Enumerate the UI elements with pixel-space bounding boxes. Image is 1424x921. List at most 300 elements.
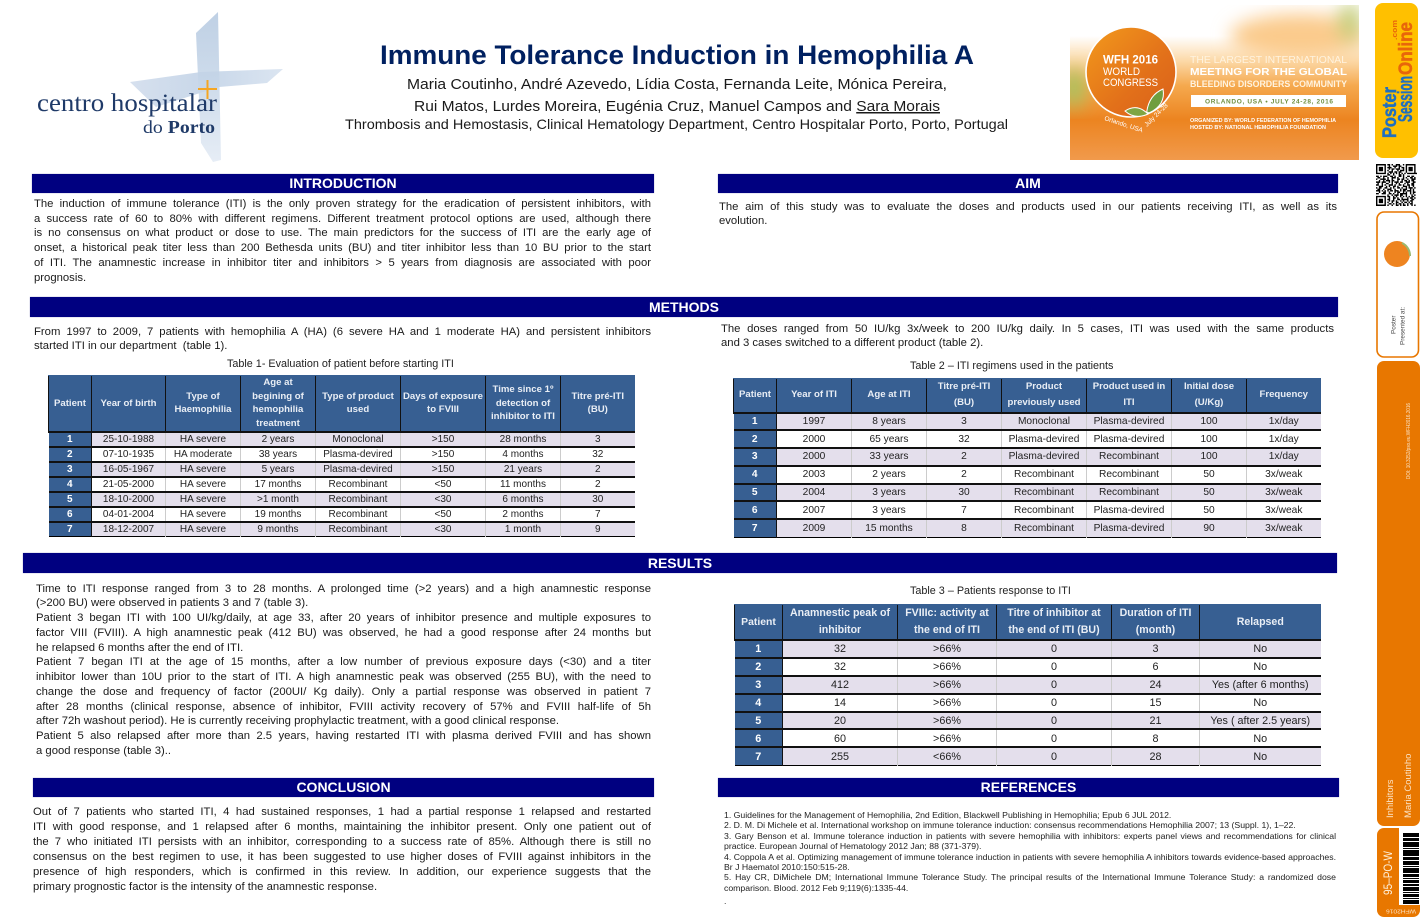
text: conclusion: ITI with good response, and 1 relapsed after 6 months, maintaining the inhibitor present. Only one patient out of (33, 820, 651, 832)
table 3: patients response: 0 (1051, 697, 1057, 709)
table 3: patients response: the end of ITI (914, 624, 980, 636)
table 2: ITI regimens: 1997 (803, 416, 825, 427)
table 1: evaluation of patients: inhibitor to ITI (491, 411, 555, 422)
table 1: evaluation of patients: 7 (67, 524, 73, 535)
table 1: evaluation of patients: Recombinant (329, 524, 387, 535)
text: aim (719, 200, 1337, 227)
congress banner: WFH 2016 World Congress: Orlando, USA (1103, 115, 1144, 134)
table 3: patients response: Relapsed (1237, 616, 1284, 628)
table 3: patients response: >66% (933, 715, 961, 727)
table 1: evaluation of patients: 21 years (504, 464, 542, 474)
table 2: ITI regimens: 3x/weak (1265, 469, 1302, 480)
table 2: ITI regimens: Plasma-devired (1094, 523, 1164, 534)
text: introduction: prognosis. (34, 272, 86, 284)
table 1: evaluation of patients: >150 (432, 434, 454, 444)
table 3: patients response: >66% (933, 679, 961, 691)
table 2: ITI regimens: Recombinant (1099, 469, 1159, 480)
PosterSessionOnline logo: Online (1396, 22, 1417, 75)
text: references: . (724, 896, 726, 906)
heading: results: RESULTS (648, 555, 712, 571)
congress banner: WFH 2016 World Congress (1070, 5, 1359, 160)
congress banner: WFH 2016 World Congress: HOSTED BY: NATIONAL HEMOPHILIA FOUNDATION (1190, 125, 1326, 131)
table 3: patients response: 32 (834, 661, 846, 673)
table 1: evaluation of patients: <30 (435, 524, 451, 535)
text: introduction (34, 198, 652, 284)
table 2: ITI regimens: 1x/day (1269, 416, 1299, 427)
table 1: evaluation of patients: 38 years (259, 448, 297, 460)
table 2: ITI regimens: 50 (1203, 487, 1215, 498)
table 2: ITI regimens: 32 (958, 434, 970, 445)
text: methods right (721, 322, 1334, 349)
text: results: he relapsed 6 months after the end of ITI. (36, 642, 243, 654)
table 1: evaluation of patients: Recombinant (329, 508, 387, 520)
table 1: evaluation of patients: 16-05-1967 (103, 464, 154, 474)
text: results: after 72h washout period). He is currently receiving prophylactic treatment, with a good clinical response. (36, 715, 559, 727)
panel: methods (30, 296, 1338, 538)
table 3: patients response: 2 (755, 661, 761, 673)
text: methods left: From 1997 to 2009, 7 patients with hemophilia A (HA) (6 severe HA and 1 moderate HA) and persistent inhibitors (34, 326, 651, 338)
table 1: evaluation of patients: Plasma-devired (323, 464, 393, 474)
table 3: patients response: No (1253, 697, 1267, 709)
table 1: evaluation of patients: 1 month (505, 524, 541, 535)
table 2: ITI regimens: Monoclonal (1018, 416, 1070, 427)
table 1: evaluation of patients: 3 (67, 464, 73, 474)
congress banner: WFH 2016 World Congress: MEETING FOR THE GLOBAL (1190, 66, 1348, 78)
table 2: ITI regimens: 8 (961, 523, 967, 534)
table 2: ITI regimens: 2 (752, 434, 758, 445)
table 1: evaluation of patients: 9 (595, 524, 601, 535)
text: results: Time to ITI response ranged from 3 to 28 months. A prolonged time (>2 years) and a high anamnestic response (36, 582, 651, 594)
table 3: patients response: 0 (1051, 751, 1057, 763)
table 1: evaluation of patients: 6 (67, 508, 73, 520)
table 1: evaluation of patients: begining of (252, 391, 304, 402)
table 1: evaluation of patients: hemophilia (253, 404, 303, 415)
table 1: evaluation of patients: 4 months (502, 448, 544, 460)
text: introduction: The induction of immune tolerance (ITI) is the only proven strategy for the eradication of persistent inhibitors, with (34, 198, 651, 210)
text: references: comparison. Blood. 2012 Feb 9;119(6):1335-44. (724, 883, 908, 893)
heading: introduction: INTRODUCTION (289, 175, 397, 191)
table 3: patients response: 21 (1149, 715, 1162, 727)
table 3: patients response: >66% (933, 697, 961, 709)
text: introduction: of ITI. The anamnestic increase in inhibitor titer and inhibitors > 5 years from diagnosis are associated with poor (34, 257, 651, 269)
heading: results (23, 553, 1337, 573)
table 2: ITI regimens: 3 (961, 416, 967, 427)
table 3: patients response: 6 (755, 733, 761, 745)
heading: introduction (32, 174, 654, 193)
text: results: a good response (table 3).. (36, 745, 171, 757)
table 2: ITI regimens: 3x/weak (1265, 523, 1302, 534)
table 2: ITI regimens: Product (1026, 381, 1062, 392)
table 3: patients response: 32 (834, 643, 846, 655)
text: references: 3. Gary Benson et al. Immune tolerance induction in patients with severe hemophilia with inhibitors: experts panel views and recommendations for clinical (724, 831, 1336, 841)
table 1: evaluation of patients: >1 month (257, 494, 299, 504)
text: introduction: a success rate of 60 to 80% with different regimens. Different treatment protocol options are used, although there (34, 213, 651, 225)
table 2: ITI regimens: 6 (752, 505, 758, 516)
table 2: ITI regimens: Year of ITI (791, 389, 837, 400)
table 1: evaluation of patients: Type of product (322, 391, 394, 402)
table 2: ITI regimens: Recombinant (1014, 505, 1074, 516)
table 2: ITI regimens: 2004 (803, 487, 825, 498)
table 1: evaluation of patients: Titre pré-ITI (571, 391, 624, 402)
table 1: evaluation of patients: 3 (595, 434, 601, 444)
table 1: evaluation of patients: 07-10-1935 (103, 448, 154, 460)
title and authors (345, 40, 1008, 132)
table 3: patients response: 6 (1152, 661, 1158, 673)
table 3: patients response: 28 (1149, 751, 1162, 763)
text: aim: evolution. (719, 215, 767, 227)
table 1: evaluation of patients (48, 375, 634, 537)
panel: conclusion (32, 778, 654, 892)
text: methods left (34, 326, 651, 352)
table 2: ITI regimens: Plasma-devired (1009, 434, 1079, 445)
table 3: patients response: 15 (1149, 697, 1162, 709)
table 1: evaluation of patients: HA severe (180, 434, 226, 444)
panel: references (718, 778, 1340, 906)
table 3: patients response: 412 (831, 679, 849, 691)
table 2: ITI regimens: 30 (958, 487, 970, 498)
text: references: 4. Coppola A et al. Optimizing management of immune tolerance induction in patients with severe hemophilia A inhibitors towards evidence-based approaches. (724, 852, 1336, 862)
congress banner: WFH 2016 World Congress: July 24-28 (1143, 102, 1170, 128)
table 3: patients response: 1 (755, 643, 761, 655)
text: conclusion: Out of 7 patients who started ITI, 4 had sustained responses, 1 had a partial response 1 relapsed and restarted (33, 806, 651, 818)
table 1: evaluation of patients: 30 (592, 494, 603, 504)
table 3: patients response: 0 (1051, 733, 1057, 745)
table 1: evaluation of patients: >150 (432, 464, 454, 474)
congress banner: WFH 2016 World Congress: BLEEDING DISORDERS COMMUNITY (1190, 79, 1348, 90)
table 1: evaluation of patients: Recombinant (329, 478, 387, 490)
panel: aim (718, 174, 1338, 227)
table 1: evaluation of patients: HA severe (180, 508, 226, 520)
table 3: patients response: No (1253, 733, 1267, 745)
table 2: ITI regimens: 100 (1200, 416, 1218, 427)
table 1: evaluation of patients: Time since 1º (493, 384, 553, 395)
table 2: ITI regimens: 3 years (872, 505, 906, 516)
poster number and barcode: 95–PO-W (1381, 850, 1395, 895)
table 2: ITI regimens: (U/Kg) (1195, 397, 1223, 408)
text: results (36, 582, 651, 757)
table 3: patients response: Yes ( after 2.5 years) (1210, 715, 1310, 727)
text: methods left: started ITI in our department (table 1). (34, 340, 227, 352)
table 2: ITI regimens: 3 years (872, 487, 906, 498)
table 1: evaluation of patients: <30 (435, 494, 451, 504)
table 3: patients response: 20 (834, 715, 846, 727)
table 3: patients response: 60 (834, 733, 846, 745)
table 1: evaluation of patients: Haemophilia (174, 404, 232, 415)
text: references: 5. Hay CR, DiMichele DM; International Immune Tolerance Study. The principal results of the International Immune Tolerance Study: a randomized dose (724, 872, 1336, 882)
text: aim: The aim of this study was to evaluate the doses and products used in our patients receiving ITI, as well as its (719, 200, 1337, 212)
table 3: patients response: 255 (831, 751, 849, 763)
text: results: Patient 3 began ITI with 100 UI/kg/daily, at age 33, after 20 years of inhibitor presence and multiple exposures to (36, 612, 651, 624)
table 3: patients response: 0 (1051, 643, 1057, 655)
table 3: patients response: Anamnestic peak of (790, 607, 890, 619)
text: results: factor VIII (FVIII). A high anamnestic peak (412 BU) was observed, he had a good response after 24 months but (36, 627, 651, 639)
table 1: evaluation of patients: 18-12-2007 (103, 524, 154, 535)
poster number and barcode: WFH2016 (1386, 908, 1416, 914)
heading: conclusion: CONCLUSION (296, 779, 391, 795)
heading: conclusion (33, 778, 654, 797)
table 2: ITI regimens: 1 (752, 416, 758, 427)
table 3: patients response: inhibitor (819, 624, 861, 636)
table 3: patients response: 3 (755, 679, 761, 691)
text: references: Br J Haematol 2010:150:515-28. (724, 862, 850, 872)
table 2: ITI regimens: 3 (752, 451, 758, 462)
table 1: evaluation of patients: HA severe (180, 478, 226, 490)
table 1: evaluation of patients: 4 (67, 478, 73, 490)
table 1: evaluation of patients: (BU) (588, 404, 608, 415)
caption: table 3: Table 3 – Patients response to ITI (910, 585, 1071, 597)
heading: methods: METHODS (649, 299, 719, 315)
table 2: ITI regimens: 2000 (803, 434, 825, 445)
table 2: ITI regimens: 3x/weak (1265, 487, 1302, 498)
table 2: ITI regimens (733, 378, 1320, 538)
table 2: ITI regimens: Recombinant (1014, 487, 1074, 498)
table 2: ITI regimens: 50 (1203, 505, 1215, 516)
congress banner: WFH 2016 World Congress: ORGANIZED BY: WORLD FEDERATION OF HEMOPHILIA (1190, 118, 1336, 124)
table 2: ITI regimens: 100 (1200, 451, 1218, 462)
table 1: evaluation of patients: Patient (54, 398, 86, 408)
authors line 1: Maria Coutinho, André Azevedo, Lídia Costa, Fernanda Leite, Mónica Pereira, (407, 76, 947, 93)
table 1: evaluation of patients: Year of birth (100, 398, 156, 408)
table 3: patients response: FVIIIc: activity at (905, 607, 989, 619)
table 2: ITI regimens: 90 (1203, 523, 1215, 534)
logo: centro hospitalar do Porto: do Porto (143, 117, 215, 137)
orange info strip: DOI: 10.3252/pso.eu.WFH2016.2016 (1406, 403, 1412, 479)
table 3: patients response: <66% (933, 751, 961, 763)
table 2: ITI regimens: Frequency (1259, 389, 1308, 400)
table 3: patients response: 0 (1051, 679, 1057, 691)
table 2: ITI regimens: Plasma-devired (1094, 416, 1164, 427)
text: conclusion: primary prognostic factor is the intensity of the anamnestic response. (33, 880, 377, 892)
table 3: patients response: Yes (after 6 months) (1212, 679, 1309, 691)
table 3: patients response: Titre of inhibitor at (1007, 607, 1101, 619)
table 2: ITI regimens: Plasma-devired (1009, 451, 1079, 462)
text: results: Patient 5 also relapsed after more than 2.5 years, having restarted ITI with plasma derived FVIII and has shown (36, 730, 651, 742)
table 2: ITI regimens: 2 (961, 451, 967, 462)
congress banner: WFH 2016 World Congress: ORLANDO, USA • JULY 24-28, 2016 (1205, 98, 1333, 106)
table 2: ITI regimens: 1x/day (1269, 451, 1299, 462)
table 1: evaluation of patients: 2 (595, 464, 601, 474)
presented-at box: Presented at: (1400, 307, 1406, 345)
congress banner: WFH 2016 World Congress: WORLD (1103, 66, 1140, 78)
table 2: ITI regimens: 1x/day (1269, 434, 1299, 445)
table 3: patients response: 0 (1051, 661, 1057, 673)
table 1: evaluation of patients: 28 months (500, 434, 546, 444)
table 2: ITI regimens: Recombinant (1099, 451, 1159, 462)
table 1: evaluation of patients: Days of exposure (403, 391, 483, 402)
text: results: change the dose and frequency of factor (200UI/ Kg daily). Only a partial response was observed in patient 7 (36, 686, 651, 698)
poster number and barcode (1377, 828, 1420, 917)
PosterSessionOnline logo: .com (1392, 20, 1399, 40)
table 1: evaluation of patients: 5 (67, 494, 73, 504)
sidebar: PosterSessionOnline strip (1375, 3, 1420, 917)
table 2: ITI regimens: (BU) (954, 397, 974, 408)
presented-at box (1377, 212, 1418, 357)
affiliation: Thrombosis and Hemostasis, Clinical Hematology Department, Centro Hospitalar Porto, Porto, Portugal (345, 116, 1008, 132)
caption: table 2: Table 2 – ITI regimens used in the patients (910, 360, 1113, 372)
table 1: evaluation of patients: detection of (496, 398, 550, 408)
congress banner: WFH 2016 World Congress: THE LARGEST INTERNATIONAL (1190, 54, 1347, 66)
logo: centro hospitalar do Porto (37, 12, 283, 162)
table 2: ITI regimens: Recombinant (1099, 487, 1159, 498)
heading: methods (30, 297, 1338, 317)
table 2: ITI regimens: 50 (1203, 469, 1215, 480)
text: introduction: onset, a historical peak titer less than 200 Bethesda units (BU) and titer inhibitor less than 10 BU prior to the start (34, 242, 651, 254)
table 2: ITI regimens: Product used in (1093, 381, 1165, 392)
table 1: evaluation of patients: 11 months (500, 478, 546, 490)
orange info strip (1377, 361, 1420, 826)
table 2: ITI regimens: Recombinant (1014, 469, 1074, 480)
QR code (1376, 164, 1417, 206)
table 2: ITI regimens: 2007 (803, 505, 825, 516)
PosterSessionOnline logo (1375, 3, 1418, 158)
table 1: evaluation of patients: 2 years (262, 434, 294, 444)
table 3: patients response: No (1253, 661, 1267, 673)
text: conclusion (33, 806, 652, 892)
table 2: ITI regimens: Plasma-devired (1094, 505, 1164, 516)
logo: centro hospitalar do Porto: centro hospitalar (37, 90, 218, 117)
table 1: evaluation of patients: 5 years (262, 464, 294, 474)
table 1: evaluation of patients: 2 (67, 448, 73, 460)
table 1: evaluation of patients: Plasma-devired (323, 448, 393, 460)
table 2: ITI regimens: 2000 (803, 451, 825, 462)
table 1: evaluation of patients: HA severe (180, 524, 226, 535)
table 1: evaluation of patients: <50 (435, 478, 451, 490)
table 1: evaluation of patients: 9 months (257, 524, 299, 535)
text: methods right: and 3 cases switched to a different product (table 2). (721, 337, 983, 349)
table 3: patients response: 8 (1152, 733, 1158, 745)
text: references: practice. European Journal of Hematology 2012 Jan; 88 (371-379). (724, 841, 981, 851)
table 3: patients response: 7 (755, 751, 761, 763)
table 3: patients response (734, 604, 1320, 766)
table 1: evaluation of patients: 6 months (502, 494, 544, 504)
table 1: evaluation of patients: HA severe (180, 494, 226, 504)
table 1: evaluation of patients: 21-05-2000 (103, 478, 154, 490)
table 1: evaluation of patients: HA moderate (174, 448, 232, 460)
text: results: inhibitor lower than 10U prior to the start of ITI. A high anamnestic peak was observed (255 BU), with the need to (36, 671, 651, 683)
caption: table 1: Table 1- Evaluation of patient before starting ITI (227, 358, 454, 370)
table 1: evaluation of patients: 1 (67, 434, 73, 444)
table 2: ITI regimens: Age at ITI (867, 389, 911, 400)
authors line 2: Rui Matos, Lurdes Moreira, Eugénia Cruz, Manuel Campos and Sara Morais (414, 98, 940, 115)
table 2: ITI regimens: Initial dose (1184, 381, 1234, 392)
text: results: after 28 months (clinical response, absence of inhibitor, FVIII activity recovery of 57% and FVIII half-life of 5h (36, 700, 651, 712)
text: conclusion: the 7 who initiated ITI persists with an inhibitor, corresponding to a success rate of 85%. Although there is still no (33, 836, 651, 848)
table 3: patients response: 3 (1152, 643, 1158, 655)
table 1: evaluation of patients: >150 (432, 448, 454, 460)
table 2: ITI regimens: 2003 (803, 469, 825, 480)
table 2: ITI regimens: 15 months (865, 523, 913, 534)
table 2: ITI regimens: 5 (752, 487, 758, 498)
table 2: ITI regimens: Patient (739, 389, 771, 400)
table 2: ITI regimens: 100 (1200, 434, 1218, 445)
table 2: ITI regimens: 7 (961, 505, 967, 516)
table 1: evaluation of patients: 18-10-2000 (103, 494, 154, 504)
table 2: ITI regimens: 2 years (872, 469, 906, 480)
text: results: Patient 7 began ITI at the age of 15 months, after a low number of previous exposure days (<30) and a titer (36, 656, 651, 668)
table 2: ITI regimens: previously used (1007, 397, 1081, 408)
PosterSessionOnline logo: Session (1395, 76, 1417, 122)
text: results: (>200 BU) were observed in patients 3 and 7 (table 3). (36, 597, 308, 609)
table 2: ITI regimens: ITI (1123, 397, 1135, 408)
table 2: ITI regimens: 4 (752, 469, 758, 480)
heading: references (718, 778, 1339, 797)
presented-at box: Poster (1390, 315, 1398, 334)
table 1: evaluation of patients: 25-10-1988 (103, 434, 154, 444)
table 1: evaluation of patients: Recombinant (329, 494, 387, 504)
table 3: patients response: >66% (933, 643, 961, 655)
table 3: patients response: 0 (1051, 715, 1057, 727)
PosterSessionOnline logo: Poster (1380, 86, 1401, 138)
table 3: patients response: 4 (755, 697, 761, 709)
congress banner: WFH 2016 World Congress: WFH 2016 (1103, 54, 1158, 66)
table 1: evaluation of patients: 04-01-2004 (103, 508, 154, 520)
table 1: evaluation of patients: Monoclonal (332, 434, 384, 444)
table 3: patients response: the end of ITI (BU) (1008, 624, 1100, 636)
table 1: evaluation of patients: 7 (595, 508, 601, 520)
table 3: patients response: 24 (1149, 679, 1162, 691)
table 2: ITI regimens: 2009 (803, 523, 825, 534)
panel: results (22, 552, 1338, 766)
congress banner: WFH 2016 World Congress: CONGRESS (1103, 77, 1158, 89)
table 3: patients response: 5 (755, 715, 761, 727)
table 2: ITI regimens: 2 (961, 469, 967, 480)
panel: introduction (32, 174, 654, 284)
table 2: ITI regimens: 65 years (869, 434, 909, 445)
poster title: Immune Tolerance Induction in Hemophilia A (380, 40, 974, 70)
table 1: evaluation of patients: 2 months (502, 508, 544, 520)
table 2: ITI regimens: 33 years (869, 451, 909, 462)
table 1: evaluation of patients: treatment (256, 418, 300, 429)
text: conclusion: consensus on the best regimen to use, it has been suggested to use higher doses of FVIII against inhibitors in the (33, 850, 651, 862)
table 1: evaluation of patients: HA severe (180, 464, 226, 474)
text: references: 2. D. M. Di Michele et al. International workshop on immune tolerance induction: consensus recommendations Hemophilia 2007; 13 (Suppl. 1), 1–22. (724, 820, 1296, 830)
table 3: patients response: No (1253, 643, 1267, 655)
orange info strip: Maria Coutinho (1403, 754, 1414, 818)
table 1: evaluation of patients: 32 (592, 448, 603, 460)
table 2: ITI regimens: Titre pré-ITI (938, 381, 990, 392)
table 1: evaluation of patients: used (347, 404, 369, 415)
table 3: patients response: Duration of ITI (1120, 607, 1191, 619)
heading: aim (718, 174, 1338, 193)
orange info strip: Inhibitors (1385, 779, 1396, 818)
table 1: evaluation of patients: to FVIII (427, 404, 459, 415)
heading: aim: AIM (1015, 175, 1041, 191)
table 2: ITI regimens: Plasma-devired (1094, 434, 1164, 445)
table 3: patients response: Patient (741, 616, 776, 628)
table 1: evaluation of patients: Age at (263, 377, 293, 388)
table 1: evaluation of patients: 19 months (255, 508, 301, 520)
text: references: 1. Guidelines for the Management of Hemophilia, 2nd Edition, Blackwell Publishing in Hemophilia; Epub 6 JUL 2012. (724, 810, 1171, 820)
leaves (1147, 89, 1163, 113)
table 3: patients response: 14 (834, 697, 846, 709)
text: references (724, 810, 1336, 906)
table 1: evaluation of patients: Type of (186, 391, 220, 402)
table 1: evaluation of patients: 17 months (255, 478, 301, 490)
table 3: patients response: >66% (933, 661, 961, 673)
heading: references: REFERENCES (981, 779, 1076, 795)
table 3: patients response: >66% (933, 733, 961, 745)
text: conclusion: presence of high responders, which is confirmed in this review. In addition, our experience suggests that the (33, 866, 651, 878)
table 3: patients response: No (1253, 751, 1267, 763)
table 2: ITI regimens: Recombinant (1014, 523, 1074, 534)
table 2: ITI regimens: 3x/weak (1265, 505, 1302, 516)
table 1: evaluation of patients: 2 (595, 478, 601, 490)
text: methods right: The doses ranged from 50 IU/kg 3x/week to 200 IU/kg daily. In 5 cases, ITI was used with the same products (721, 322, 1334, 334)
table 3: patients response: (month) (1136, 624, 1175, 636)
table 1: evaluation of patients: <50 (435, 508, 451, 520)
table 2: ITI regimens: 7 (752, 523, 758, 534)
text: introduction: is no consensus on what product or dose to use. The main predictors for the success of ITI are the early age of (34, 227, 651, 239)
